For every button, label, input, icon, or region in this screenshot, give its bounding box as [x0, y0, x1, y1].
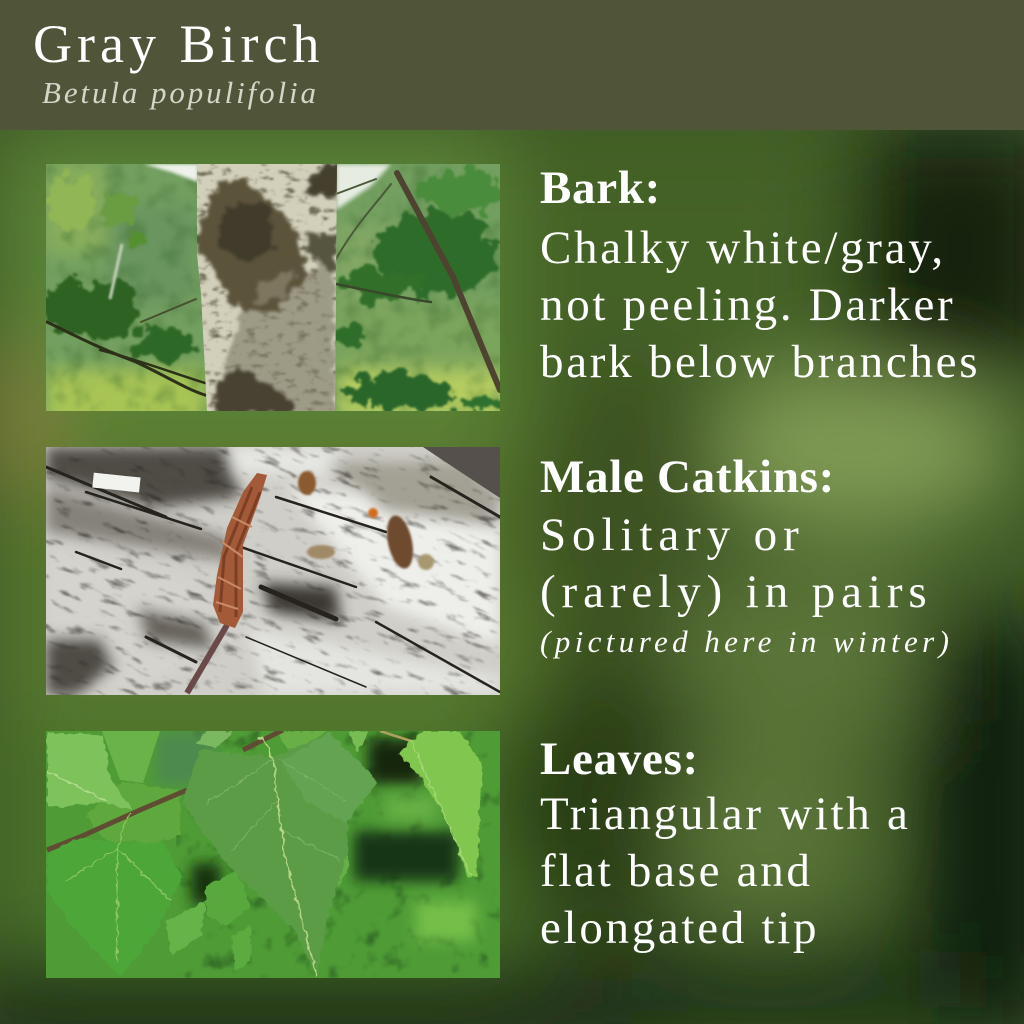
- blurred conifer background: [176, 731, 500, 978]
- leaves heading: Leaves:: [540, 733, 699, 785]
- bark description: Chalky white/gray,: [540, 222, 946, 274]
- catkins description: Solitary or: [540, 509, 805, 561]
- bark description: not peeling. Darker: [540, 279, 955, 331]
- bark description: bark below branches: [540, 336, 980, 388]
- upper leaf: [102, 731, 160, 783]
- leaves description: [540, 788, 911, 954]
- light and dark bark patches: [46, 447, 500, 695]
- text block: bark: [540, 162, 980, 388]
- catkins heading: Male Catkins:: [540, 451, 835, 503]
- leaves description: elongated tip: [540, 902, 819, 954]
- catkin: [187, 473, 267, 693]
- bark heading: Bark:: [540, 162, 661, 214]
- leaves description: Triangular with a: [540, 788, 911, 840]
- catkins description: [540, 509, 953, 659]
- blurred forest and meadow: [46, 164, 506, 429]
- small background leaves: [86, 731, 368, 971]
- photo: birch bark trunk: [46, 164, 500, 411]
- branches: [47, 173, 500, 395]
- trunk with branch scars: [191, 164, 341, 414]
- lower-left leaf: [47, 813, 182, 977]
- leaves description: flat base and: [540, 845, 813, 897]
- top-left leaf: [47, 732, 133, 810]
- text block: leaves: [540, 733, 911, 954]
- dark fissures: [46, 467, 500, 692]
- header band: [0, 0, 1024, 130]
- right leaf: [398, 731, 483, 877]
- brown debris on bark: [298, 471, 434, 571]
- large central leaf: [182, 733, 378, 977]
- title: Gray Birch: [33, 14, 324, 74]
- bark description: [540, 222, 980, 388]
- photo: green birch leaves: [46, 731, 500, 978]
- photo: male catkin on bark: [46, 447, 500, 695]
- branch: [47, 730, 283, 850]
- scientific name: Betula populifolia: [42, 75, 319, 110]
- text block: male catkins: [540, 451, 953, 659]
- dark foliage clusters: [41, 170, 503, 412]
- catkins description: (rarely) in pairs: [540, 566, 933, 618]
- catkins description: (pictured here in winter): [540, 624, 953, 659]
